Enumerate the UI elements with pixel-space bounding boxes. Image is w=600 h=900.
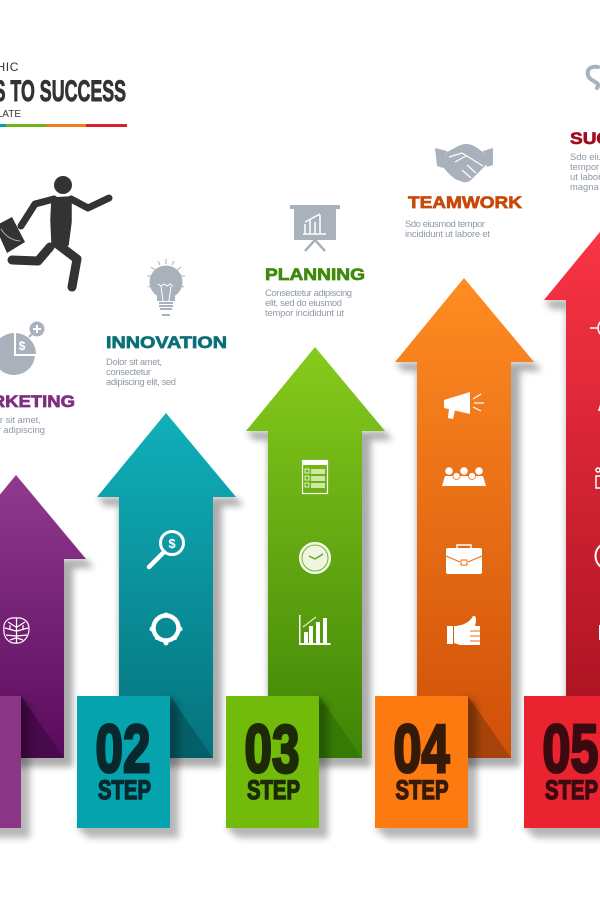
- icon: magnifier with dollar: $: [168, 536, 176, 551]
- panel: step 3 planning: [226, 265, 393, 838]
- card: step 02: 02: [96, 711, 150, 787]
- arrow shadow: [544, 300, 570, 767]
- card: step 02: [77, 696, 170, 828]
- text: innovation body: adipiscing elit, sed: [106, 376, 176, 387]
- icon: presentation board: [290, 205, 340, 251]
- arrow: green: [246, 347, 385, 758]
- arrow: teal: [97, 413, 236, 758]
- icon: success top right: [588, 67, 598, 88]
- fold: green: [319, 696, 362, 758]
- icon: gear: [150, 612, 182, 646]
- card shadow: [0, 696, 30, 838]
- arrow: purple: [0, 475, 86, 758]
- icon: bar chart: [299, 615, 330, 645]
- card: step 03: 03: [244, 711, 300, 787]
- icon: thumbs up: [447, 616, 480, 645]
- text: innovation body: Dolor sit amet,: [106, 356, 162, 367]
- title block: [0, 60, 127, 127]
- panel: step 1 marketing: [0, 392, 94, 838]
- panel: step 2 innovation: [77, 333, 244, 838]
- text: planning body: [265, 287, 352, 318]
- arrow shadow: [0, 559, 94, 767]
- panel: step 5 success: [524, 129, 600, 838]
- card shadow: [524, 696, 600, 838]
- heading: planning: PLANNING: [265, 265, 365, 284]
- card: step 04: [375, 696, 468, 828]
- text: marketing body: [0, 414, 45, 435]
- icon: pie chart with plus: $: [19, 339, 26, 353]
- card: step 02: STEP: [98, 775, 151, 805]
- text: innovation body: [106, 356, 176, 387]
- arrow shadow: [246, 431, 393, 767]
- arrow shadow: [97, 497, 244, 767]
- card shadow: [77, 696, 179, 838]
- icon: pie chart with plus: [0, 322, 44, 375]
- icon: target: [590, 319, 600, 337]
- arrow shadow: [395, 362, 542, 767]
- fold: orange: [468, 696, 511, 758]
- card shadow: [226, 696, 328, 838]
- icon: brain: [4, 618, 29, 643]
- text: planning body: elit, sed do eiusmod: [265, 297, 342, 308]
- panel: step 4 teamwork: [375, 193, 542, 838]
- text: innovation body: consectetur: [106, 366, 151, 377]
- icon: megaphone: [444, 392, 484, 419]
- icon: magnifier with dollar: [149, 532, 184, 567]
- text: teamwork body: [405, 218, 490, 239]
- icon: gift: [596, 468, 600, 488]
- icon: running businessman: [0, 176, 109, 287]
- card: step 04: STEP: [396, 775, 448, 805]
- text: teamwork body: incididunt ut labore et: [405, 228, 490, 239]
- arrow: red: [544, 216, 600, 758]
- icon: team people: [442, 467, 486, 486]
- icon: handshake: [435, 144, 493, 182]
- text: planning body: tempor incididunt ut: [265, 307, 344, 318]
- icon: briefcase: [446, 545, 482, 574]
- arrow: orange: [395, 278, 534, 758]
- icon: lower glyph: [599, 625, 600, 640]
- text: planning body: Consectetur adipiscing: [265, 287, 352, 298]
- heading: innovation: INNOVATION: [106, 333, 227, 352]
- card: step 03: STEP: [247, 775, 300, 805]
- card shadow: [375, 696, 477, 838]
- icon: triangle shape: [598, 395, 600, 411]
- fold: teal: [170, 696, 213, 758]
- card: step 01: [0, 696, 21, 828]
- icon: lightbulb: [147, 259, 185, 315]
- icon: clock: [300, 542, 330, 574]
- rainbow rule: [0, 124, 127, 127]
- text: success body: [570, 151, 600, 192]
- heading: teamwork: TEAMWORK: [408, 193, 523, 212]
- icon: round badge: [596, 542, 600, 570]
- icon: checklist form: [302, 460, 328, 494]
- card: step 04: 04: [394, 711, 450, 787]
- fold: purple: [21, 696, 64, 758]
- text: teamwork body: Sdo eiusmod tempor: [405, 218, 485, 229]
- card: step 05: [524, 696, 600, 828]
- card: step 03: [226, 696, 319, 828]
